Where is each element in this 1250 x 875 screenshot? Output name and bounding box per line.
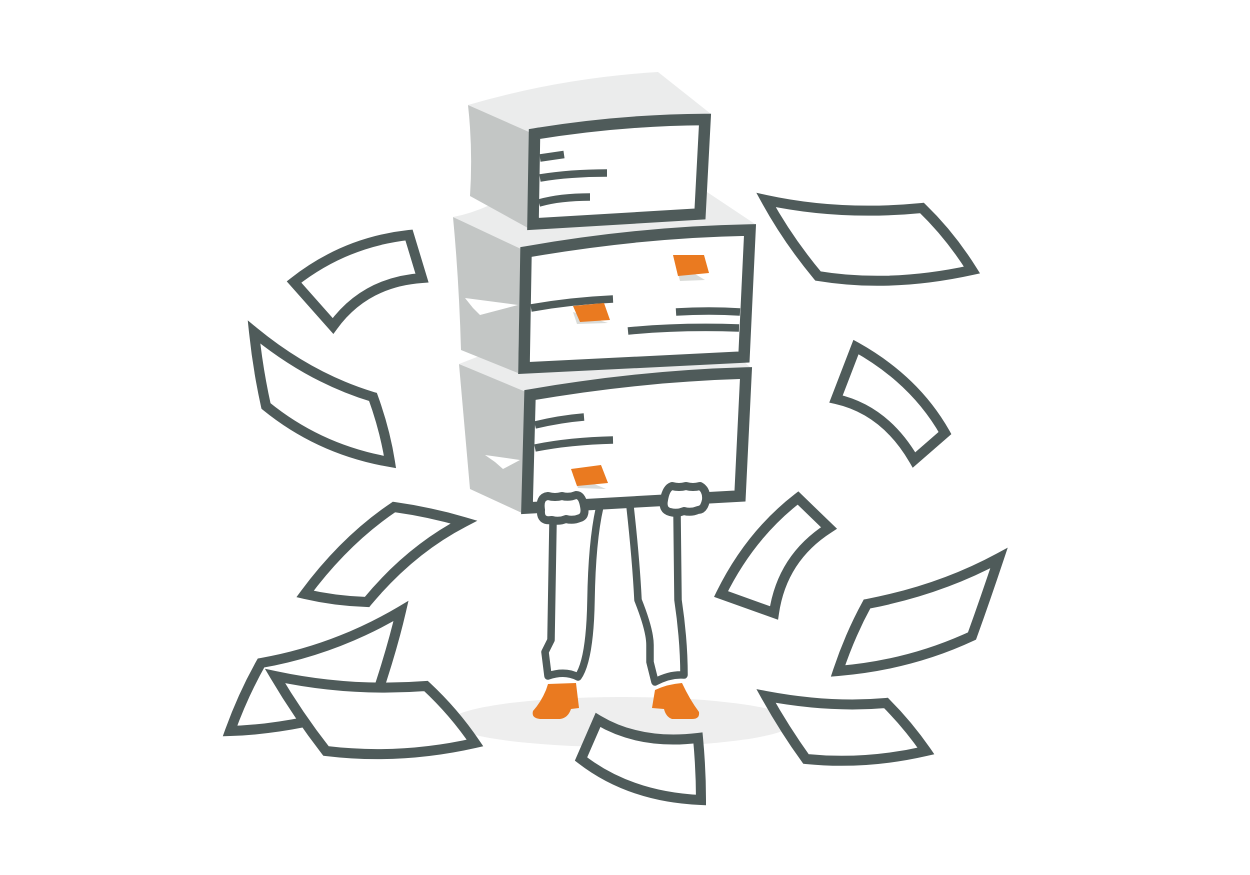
box top face xyxy=(459,340,751,392)
sticky note right xyxy=(673,255,709,281)
flying paper: middle right lower xyxy=(721,498,829,613)
flying paper: bottom left front xyxy=(275,676,475,754)
flying paper: middle right upper xyxy=(836,347,945,460)
text lines xyxy=(535,417,613,448)
left leg xyxy=(545,506,600,677)
flying paper: left xyxy=(254,332,390,462)
paper box: top of stack xyxy=(468,72,711,228)
flying paper: upper left small xyxy=(294,235,422,326)
flying paper: lower left xyxy=(305,507,464,602)
box side xyxy=(459,364,526,513)
sticky note xyxy=(571,465,608,489)
right shoe xyxy=(652,683,699,719)
right leg xyxy=(630,506,684,682)
flying paper: bottom centre xyxy=(581,720,701,800)
flying paper: upper right xyxy=(766,200,972,281)
box front xyxy=(533,120,705,224)
box top face xyxy=(453,192,755,249)
paper box: middle of stack xyxy=(453,192,755,373)
text lines xyxy=(539,154,607,203)
sticky note left xyxy=(573,303,610,324)
torn corner xyxy=(485,455,520,469)
floor shadow xyxy=(450,697,794,747)
box side xyxy=(468,105,529,228)
text lines xyxy=(531,299,740,331)
right hand xyxy=(664,486,706,513)
paper box: bottom of stack xyxy=(459,340,751,513)
left shoe xyxy=(533,683,579,719)
torn corner xyxy=(465,298,518,315)
box front xyxy=(527,373,746,508)
box front xyxy=(524,230,750,368)
flying paper: bottom right xyxy=(766,696,926,761)
flying paper: bottom left behind xyxy=(230,611,401,731)
box top face xyxy=(468,72,711,132)
box side xyxy=(453,217,521,373)
flying paper: far right xyxy=(838,558,999,671)
left hand xyxy=(541,495,584,521)
